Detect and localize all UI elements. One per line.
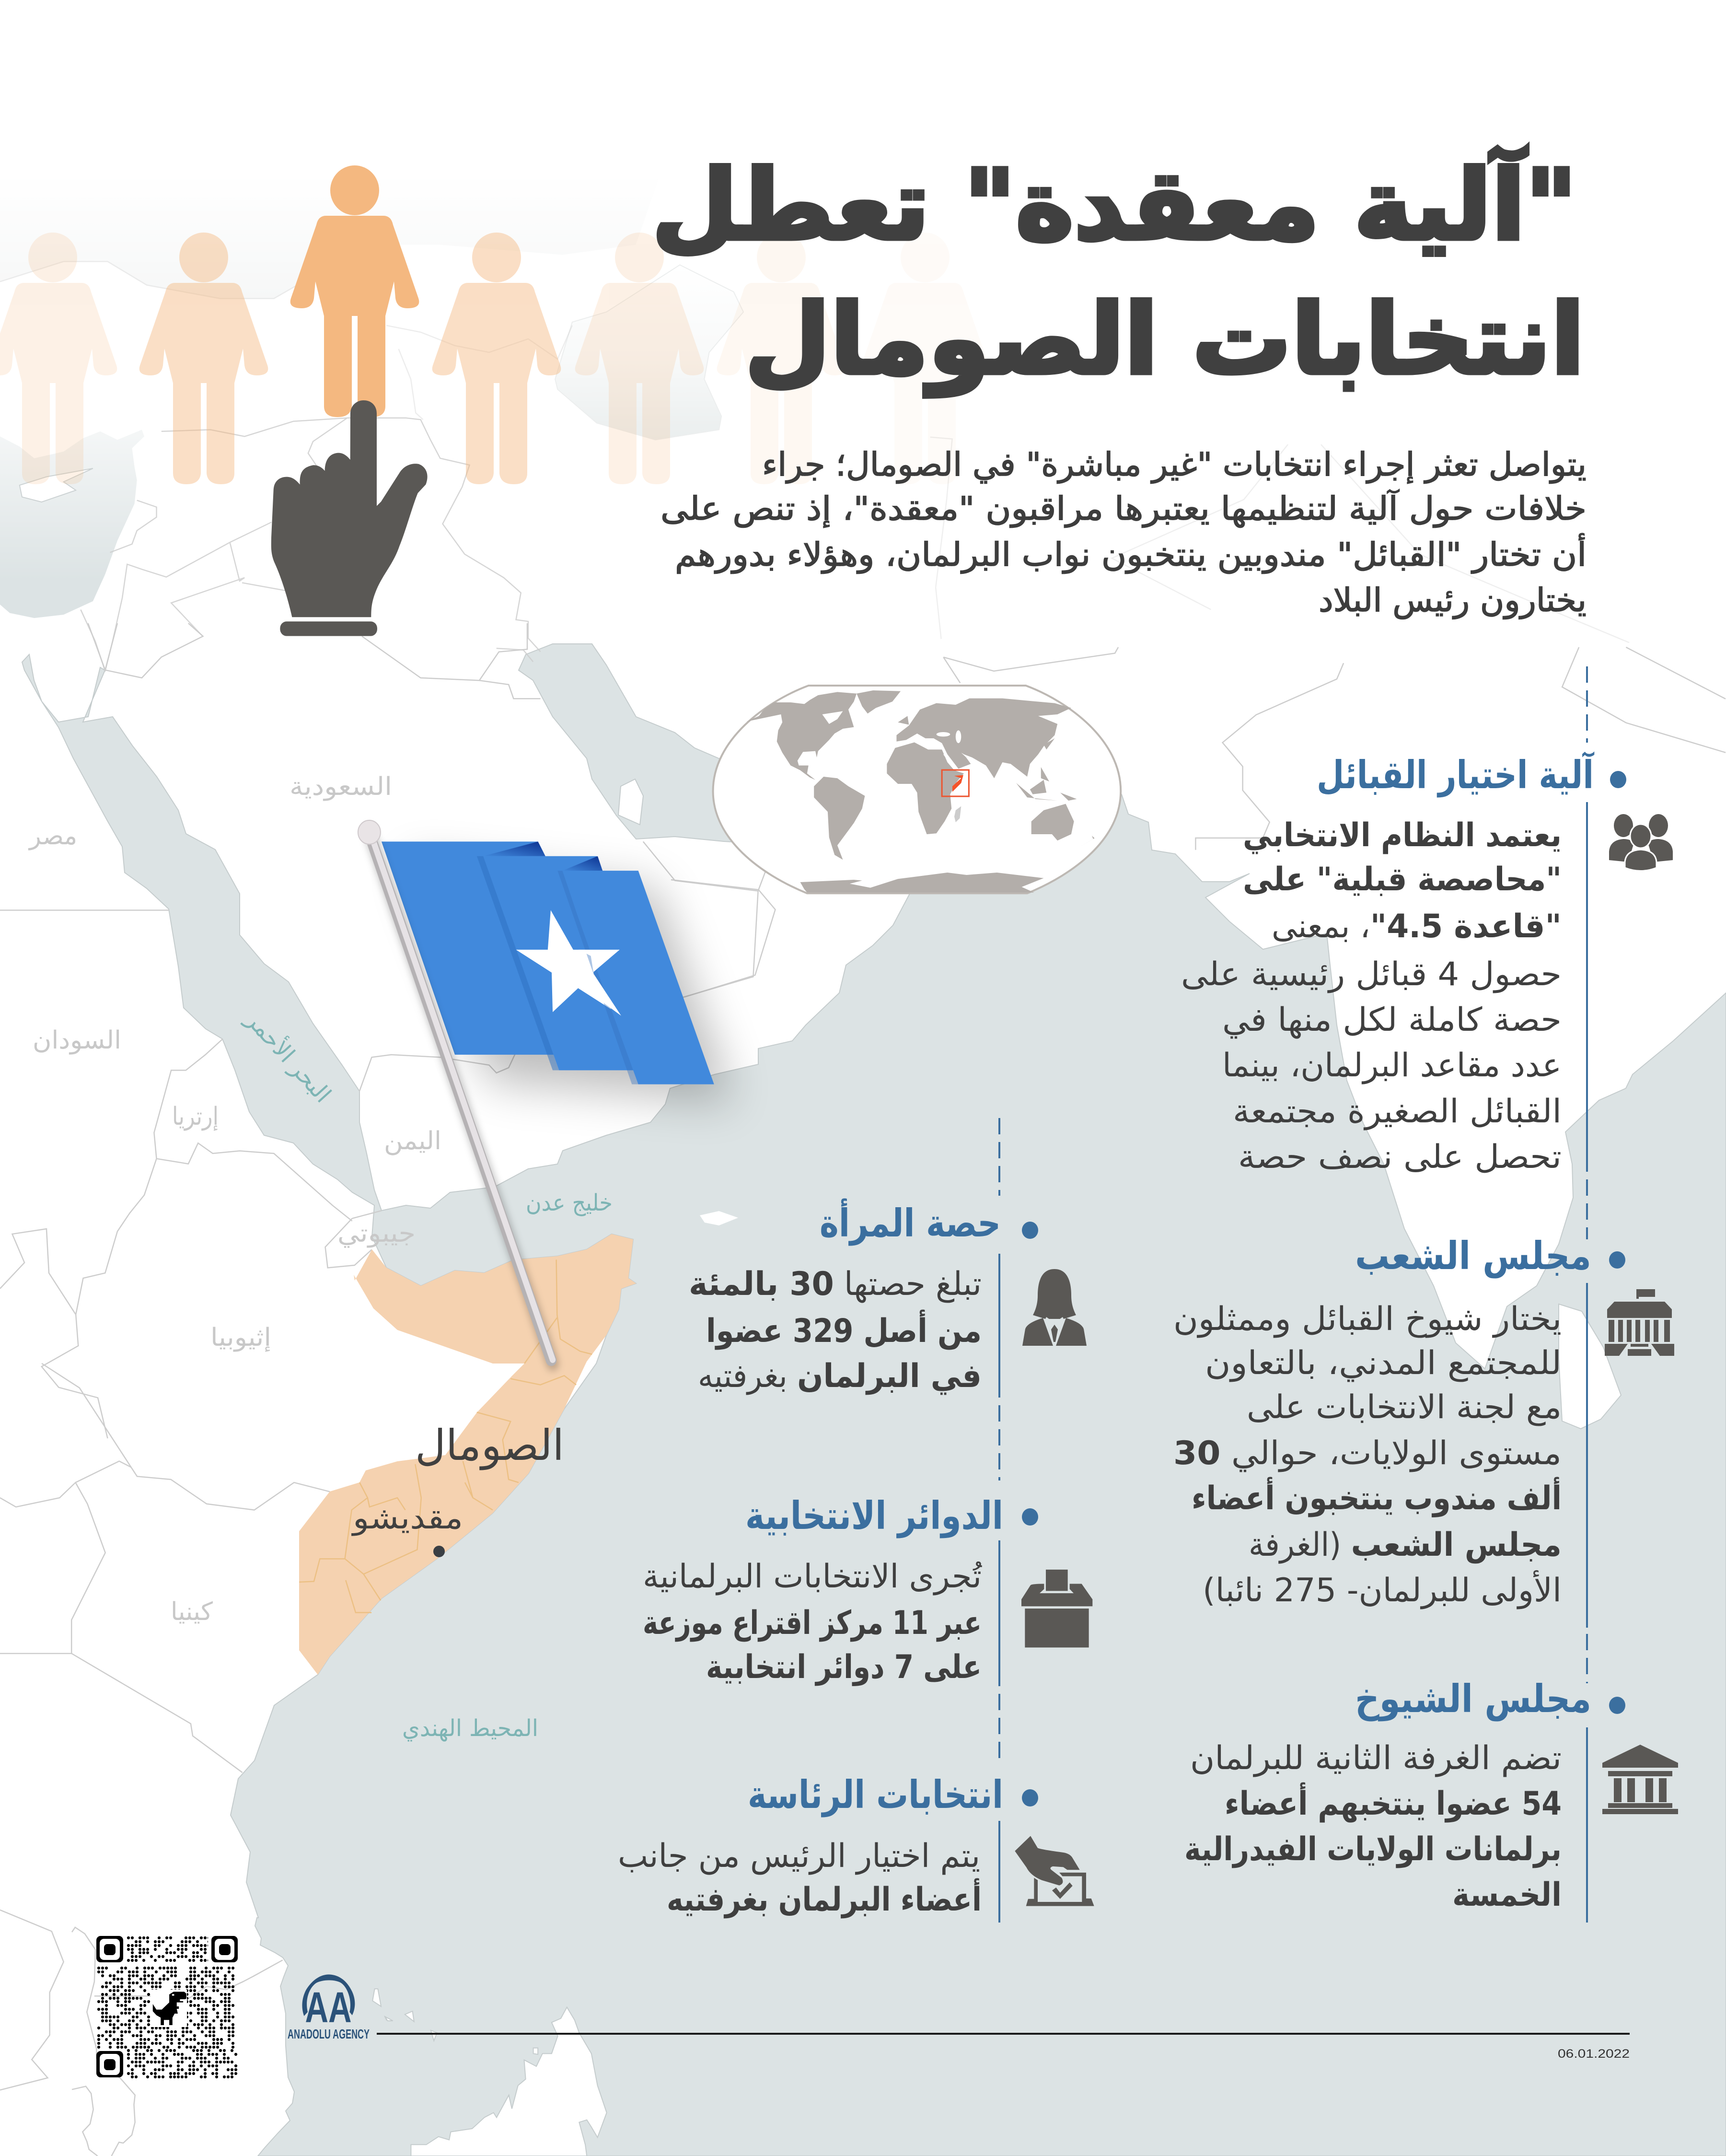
bullet <box>1609 1697 1625 1714</box>
somali flag on pole <box>358 820 734 1364</box>
heading: انتخابات الرئاسة <box>748 1772 1003 1818</box>
map: madagascar <box>385 2007 607 2156</box>
finder patterns <box>96 1936 238 2077</box>
heading: مجلس الشعب <box>1355 1234 1591 1278</box>
panel: tribal selection mechanism <box>1181 751 1673 1176</box>
body text: برلمانات الولايات الفيدرالية <box>1184 1830 1562 1868</box>
figure <box>139 233 268 484</box>
intro text <box>660 446 1587 619</box>
body text <box>618 1837 982 1919</box>
body text: ألف مندوب ينتخبون أعضاء <box>1192 1477 1562 1517</box>
timeline line <box>998 1254 1000 1398</box>
intro text: يتواصل تعثر إجراء انتخابات "غير مباشرة" في الصومال؛ جراء <box>762 446 1587 484</box>
body text: "محاصصة قبلية" على <box>1243 861 1562 898</box>
body text: من أصل 329 عضوا <box>706 1309 982 1350</box>
locator: somalia marker <box>942 770 969 796</box>
body text: الخمسة <box>1452 1876 1562 1914</box>
panel: women's quota <box>689 1199 1087 1398</box>
heading: آلية اختيار القبائل <box>1317 751 1594 798</box>
body text: حصول 4 قبائل رئيسية على <box>1181 956 1562 993</box>
figure <box>0 233 117 484</box>
people row <box>0 165 989 484</box>
body text: يختار شيوخ القبائل وممثلون <box>1173 1300 1562 1338</box>
heading: حصة المرأة <box>820 1199 1001 1246</box>
body text <box>1181 816 1562 1176</box>
title: "آلية معقدة" تعطل <box>652 146 1577 262</box>
icon: pointing hand <box>271 400 428 636</box>
flag pole <box>358 820 553 1364</box>
body text: أعضاء البرلمان بغرفتيه <box>667 1878 982 1919</box>
label: kenya: كينيا <box>171 1597 213 1626</box>
qr code <box>96 1934 241 2077</box>
body text: القبائل الصغيرة مجتمعة <box>1233 1093 1562 1130</box>
body text: تُجرى الانتخابات البرلمانية <box>643 1558 982 1596</box>
bullet <box>1022 1222 1038 1239</box>
bullet <box>1610 771 1626 788</box>
label: indian ocean: المحيط الهندي <box>402 1715 538 1742</box>
label: sudan: السودان <box>33 1026 121 1055</box>
footer line <box>377 2033 1630 2035</box>
label: djibouti: جيبوتي <box>337 1219 416 1248</box>
heading: مجلس الشيوخ <box>1355 1677 1591 1722</box>
label: ethiopia: إثيوبيا <box>210 1323 271 1352</box>
label: red sea: البحر الأحمر <box>240 1005 337 1108</box>
body text: تحصل على نصف حصة <box>1238 1138 1562 1176</box>
panel: house of the people <box>1173 1234 1674 1628</box>
body text: 54 عضوا ينتخبهم أعضاء <box>1225 1782 1562 1823</box>
body text: تضم الغرفة الثانية للبرلمان <box>1190 1739 1562 1777</box>
icon: ballot box <box>1021 1570 1092 1647</box>
timeline line <box>1586 1727 1588 1923</box>
heading: الدوائر الانتخابية <box>745 1493 1003 1538</box>
body text: يتم اختيار الرئيس من جانب <box>618 1837 980 1875</box>
figure <box>717 233 846 484</box>
label: yemen: اليمن <box>384 1127 441 1155</box>
figure <box>861 233 989 484</box>
logo: anadolu agency: AA <box>305 1984 352 2032</box>
icon: woman <box>1022 1269 1087 1346</box>
body text: للمجتمع المدني، بالتعاون <box>1205 1344 1562 1382</box>
title: انتخابات الصومال <box>745 283 1585 396</box>
map: socotra <box>700 1211 738 1225</box>
panel: electoral districts <box>643 1493 1092 1686</box>
flag shadow <box>406 862 734 1101</box>
body text: يعتمد النظام الانتخابي <box>1243 816 1562 854</box>
intro text: يختارون رئيس البلاد <box>1319 582 1587 619</box>
timeline line <box>998 1540 1000 1686</box>
label: egypt: مصر <box>28 822 77 851</box>
body text: الأولى للبرلمان- 275 نائبا) <box>1203 1570 1562 1609</box>
body text <box>1184 1739 1562 1914</box>
intro text: أن تختار "القبائل" مندوبين ينتخبون نواب البرلمان، وهؤلاء بدورهم <box>675 533 1587 574</box>
intro text: خلافات حول آلية لتنظيمها يعتبرها مراقبون "معقدة"، إذ تنص على <box>660 489 1587 528</box>
body text: تبلغ حصتها 30 بالمئة <box>689 1265 982 1303</box>
icon: group of people <box>1609 814 1673 871</box>
label: saudi arabia: السعودية <box>290 772 392 801</box>
body text: مجلس الشعب (الغرفة <box>1249 1526 1562 1564</box>
body text <box>689 1265 982 1395</box>
body text: مع لجنة الانتخابات على <box>1247 1388 1562 1426</box>
timeline line <box>998 1821 1000 1923</box>
label: mogadishu: مقديشو <box>351 1501 463 1536</box>
panel: senate <box>1184 1677 1678 1923</box>
bullet <box>1022 1508 1038 1526</box>
title <box>652 146 1585 396</box>
label: gulf of aden: خليج عدن <box>526 1189 613 1216</box>
date: 06.01.2022 <box>1558 2047 1630 2061</box>
label: eritrea: إرتريا <box>172 1102 219 1131</box>
map: somalia regions <box>299 1259 592 1613</box>
timeline line <box>1586 1283 1588 1628</box>
body text: عبر 11 مركز اقتراع موزعة <box>643 1604 982 1642</box>
label: somalia: الصومال <box>415 1421 564 1470</box>
icon: dinosaur <box>153 1992 186 2025</box>
body text: مستوى الولايات، حوالي 30 <box>1173 1434 1562 1472</box>
panel: presidential election <box>618 1772 1094 1923</box>
map: faded northern seas <box>0 174 743 618</box>
figure <box>575 233 704 484</box>
map: persian gulf <box>519 644 767 844</box>
map labels <box>28 772 613 1742</box>
body text: عدد مقاعد البرلمان، بينما <box>1222 1047 1562 1084</box>
body text: حصة كاملة لكل منها في <box>1222 1001 1562 1039</box>
marker: mogadishu <box>433 1546 445 1557</box>
icon: hand casting ballot <box>1015 1836 1094 1906</box>
timeline line <box>1586 802 1588 1172</box>
bullet <box>1022 1789 1038 1806</box>
logo: anadolu agency <box>288 1974 370 2041</box>
map: sri lanka <box>1559 1304 1621 1429</box>
body text: "قاعدة 4.5"، بمعنى <box>1272 908 1562 945</box>
figure: selected <box>290 165 419 417</box>
figure <box>432 233 561 484</box>
dashed connectors <box>999 666 1587 1761</box>
icon: parliament building <box>1605 1289 1674 1356</box>
map: small coastal islands <box>372 1989 393 2021</box>
body text: في البرلمان بغرفتيه <box>698 1357 982 1395</box>
map: qatar <box>618 779 643 825</box>
inset: world locator globe <box>713 686 1121 893</box>
body text <box>1173 1300 1562 1609</box>
bullet <box>1609 1251 1625 1269</box>
map: somalia <box>299 1234 636 1675</box>
body text <box>643 1558 982 1686</box>
icon: columned senate building <box>1602 1745 1678 1814</box>
logo: anadolu agency: ANADOLU AGENCY <box>288 2027 370 2041</box>
flag panels <box>382 841 714 1084</box>
body text: على 7 دوائر انتخابية <box>706 1648 982 1686</box>
map: sea <box>22 654 1726 2156</box>
